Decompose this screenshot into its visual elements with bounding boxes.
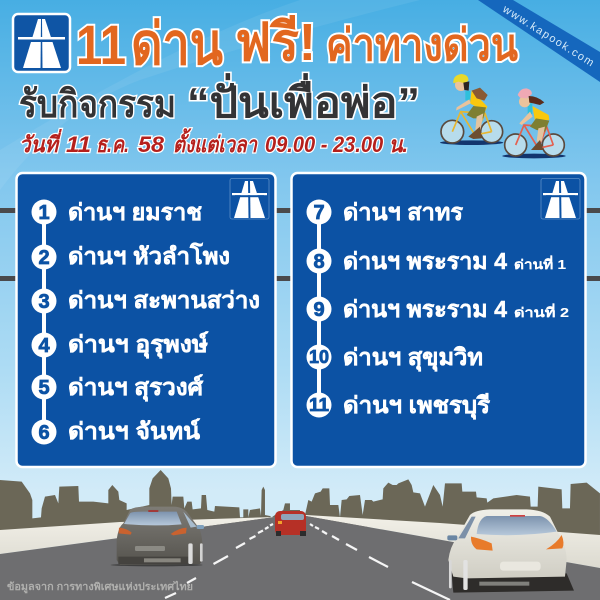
city skyline [0, 470, 600, 540]
title: orange heading: 11 [76, 13, 126, 76]
title: orange heading: ค่าทางด่วน [326, 21, 518, 70]
sign support bars [0, 208, 600, 281]
marker numbers left: 5 [38, 377, 50, 399]
lane markings [165, 524, 450, 600]
icon: motorway logo [13, 14, 70, 72]
toll names right: ด่านฯ พระราม 4 [343, 248, 507, 274]
illustration: cyclists [440, 74, 566, 158]
toll names left: ด่านฯ สุรวงศ์ [68, 374, 203, 402]
subtitle: activity name: “ปั่นเพื่อพ่อ” [187, 73, 420, 126]
toll names right [343, 199, 569, 420]
marker numbers left: 4 [38, 335, 50, 357]
marker numbers right: 10 [309, 347, 329, 367]
title: orange heading [76, 12, 518, 77]
toll names right: ด่านฯ เพชรบุรี [343, 392, 491, 420]
toll names right: ด่านฯ สาทร [343, 199, 464, 225]
route line right [317, 212, 321, 405]
ribbon: kapook url: www.kapook.com [500, 3, 596, 69]
date line: 58 [138, 132, 165, 157]
station markers left [32, 200, 56, 444]
marker numbers left: 1 [38, 202, 50, 224]
route line left [42, 212, 46, 432]
marker numbers left [38, 202, 50, 444]
marker numbers right: 8 [313, 251, 325, 273]
toll names left: ด่านฯ ยมราช [68, 199, 202, 225]
source credit: ข้อมูลจาก การทางพิเศษแห่งประเทศไทย [7, 580, 193, 594]
panel: right toll list [292, 173, 586, 467]
marker numbers left: 3 [38, 291, 50, 313]
subtitle: activity name: รับกิจกรรม [19, 84, 176, 126]
title: orange heading: ด่าน [131, 12, 223, 77]
road [0, 516, 600, 600]
toll names left: ด่านฯ อุรุพงษ์ [68, 331, 209, 359]
toll names left: ด่านฯ หัวลำโพง [68, 242, 230, 269]
panel: left toll list [16, 173, 276, 467]
date line [19, 128, 408, 157]
car: white hatchback [447, 509, 574, 593]
marker numbers left: 2 [38, 247, 50, 269]
station markers right [306, 200, 332, 418]
car: red distant [275, 511, 306, 536]
icon: motorway sign left [230, 178, 269, 219]
toll names right: ด่านฯ พระราม 4 [343, 296, 507, 322]
barrier wall [0, 515, 600, 568]
toll names right: ด่านที่ 1 [514, 255, 566, 272]
toll names right: ด่านที่ 2 [514, 303, 569, 320]
icon: motorway sign right [541, 178, 580, 219]
sky swoosh [0, 0, 420, 190]
marker numbers right [309, 202, 329, 415]
date line: ตั้งแต่เวลา [173, 128, 258, 157]
date line: วันที่ [19, 128, 63, 157]
car: grey hatchback [111, 507, 204, 566]
toll names right: ด่านฯ สุขุมวิท [343, 344, 483, 372]
date line: ธ.ค. [96, 132, 129, 157]
title: orange heading: ฟรี! [235, 14, 316, 72]
marker numbers right: 7 [313, 202, 325, 224]
toll names left: ด่านฯ จันทน์ [68, 418, 200, 444]
toll names left [68, 199, 260, 444]
marker numbers left: 6 [38, 422, 50, 444]
date line: 09.00 - 23.00 น. [265, 132, 408, 157]
ribbon: kapook url [478, 0, 600, 82]
marker numbers right: 11 [309, 395, 329, 415]
toll names left: ด่านฯ สะพานสว่าง [68, 287, 260, 313]
subtitle: activity name [19, 73, 420, 126]
date line: 11 [66, 132, 91, 157]
marker numbers right: 9 [313, 299, 325, 321]
